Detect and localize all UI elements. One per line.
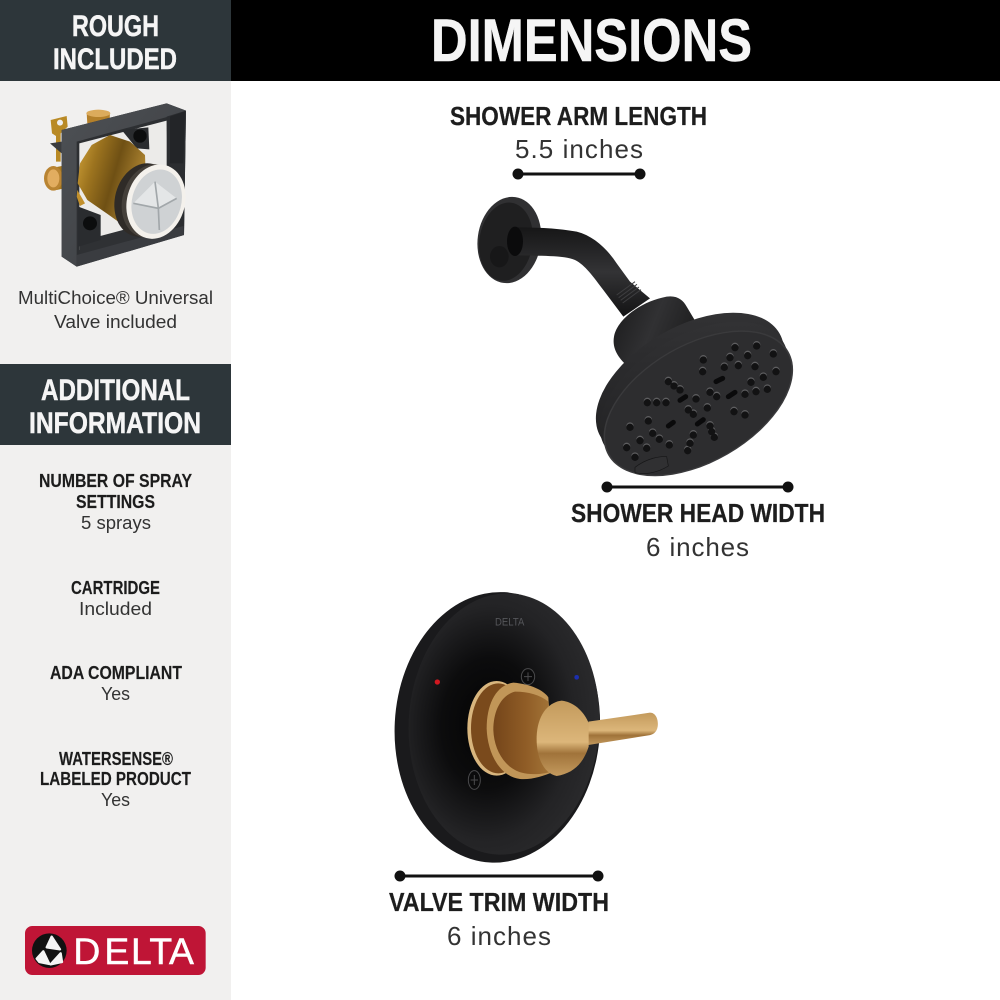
spec: ADA compliant [50,663,182,704]
spec: WaterSense: WATERSENSE® [59,749,173,769]
label: shower head width: SHOWER HEAD WIDTH [571,498,825,528]
neck [614,296,697,368]
sidebar background [0,0,231,1000]
hot indicator [435,679,440,685]
spec: spray settings: SETTINGS [76,492,155,512]
text: valve caption: MultiChoice® Universal [18,288,213,308]
spec: cartridge [71,578,160,619]
trim plate [388,587,607,868]
cold indicator [574,675,579,680]
heading: additional information: INFORMATION [29,407,201,440]
title banner [231,0,1000,81]
title banner: DIMENSIONS [431,7,752,74]
dimension line: valve trim [394,870,604,882]
label: valve trim width: 6 inches [447,921,551,951]
text: valve caption [18,288,213,332]
valve trim [388,587,658,868]
dimension line: shower head [602,482,794,492]
shower head and arm [472,193,818,506]
logo: Delta [25,926,206,975]
spec: WaterSense: LABELED PRODUCT [40,769,191,789]
dimension line: arm [512,168,646,180]
head body [571,283,818,506]
flange [472,193,547,287]
label: shower head width [571,498,825,562]
label: shower arm length: SHOWER ARM LENGTH [450,101,707,131]
spray nozzles [627,345,776,457]
spec: spray settings [39,471,192,533]
screws [468,669,535,789]
text: valve caption: Valve included [54,312,177,332]
label: valve trim width: VALVE TRIM WIDTH [389,887,609,917]
icon: rough-in valve [44,103,194,267]
label: shower head width: 6 inches [646,532,749,562]
spec: ADA compliant: Yes [101,684,130,704]
spec: WaterSense [40,749,191,810]
spec: ADA compliant: ADA COMPLIANT [50,663,182,683]
spec: WaterSense: Yes [101,790,130,810]
spec: cartridge: CARTRIDGE [71,578,160,598]
label: shower arm length [450,101,707,164]
heading: rough included [0,0,231,81]
heading: rough included: INCLUDED [53,43,177,76]
arm [507,227,650,317]
spec: spray settings: NUMBER OF SPRAY [39,471,192,491]
plate logo: DELTA [495,617,525,629]
heading: rough included: ROUGH [72,10,159,43]
logo: Delta: DELTA [73,930,194,972]
spec: spray settings: 5 sprays [81,513,151,533]
heading: additional information [0,364,231,445]
spec: cartridge: Included [79,599,152,619]
spray selector tab [635,457,668,474]
heading: additional information: ADDITIONAL [41,374,190,407]
label: shower arm length: 5.5 inches [515,134,643,164]
label: valve trim width [389,887,609,951]
gold handle [467,681,658,779]
